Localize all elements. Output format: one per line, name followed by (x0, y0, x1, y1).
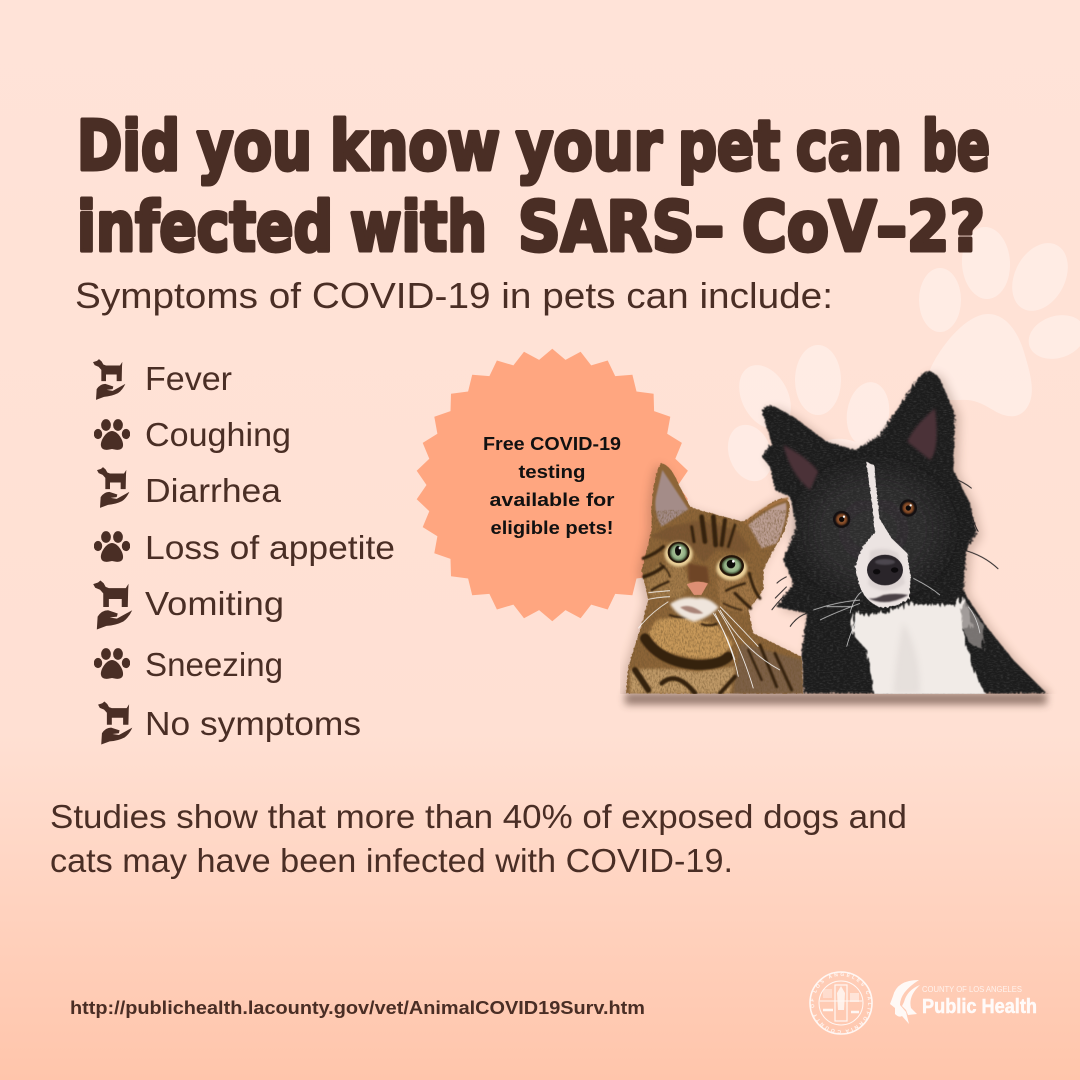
icon: paw (94, 531, 130, 562)
callout text: available for (490, 490, 614, 510)
starburst shape (417, 349, 688, 621)
cat fur texture (627, 510, 803, 693)
title: SARS– (518, 188, 724, 268)
cat nose and muzzle (670, 563, 719, 622)
title: Did (77, 106, 180, 186)
cat whiskers (638, 591, 780, 688)
cat (626, 463, 803, 693)
dog mouth (868, 594, 908, 602)
logo: public health (890, 980, 1037, 1024)
large paw watermark (919, 226, 1080, 416)
subtitle: Symptoms of COVID-19 in pets can include: (75, 275, 833, 316)
symptom: sneezing: Sneezing (145, 646, 283, 683)
symptom: coughing: Coughing (145, 416, 291, 453)
logo small text: COUNTY OF LOS ANGELES (922, 984, 1022, 994)
dog whiskers and wisps (813, 578, 980, 647)
icon: paw (94, 419, 130, 450)
cat ear left inner (655, 470, 688, 527)
logo faces (890, 980, 920, 1024)
photo bottom shadow (625, 693, 1047, 705)
icon: dog and hand (98, 701, 132, 745)
cat eyes (665, 541, 747, 580)
dog ear right inner (907, 408, 937, 460)
callout text (483, 434, 621, 538)
cat dark stripes (635, 517, 792, 693)
source url: http://publichealth.lacounty.gov/vet/AnimalCOVID19Surv.htm (70, 998, 645, 1018)
cat ear rim (745, 498, 788, 523)
icon: dog and hand (97, 467, 129, 508)
icon: dog and hand (93, 359, 125, 400)
dog stray hair (772, 478, 998, 627)
title: your (516, 106, 662, 186)
icon: paw (94, 648, 130, 679)
symptom list (93, 359, 395, 745)
dog eyes (833, 499, 917, 528)
statistic text: cats may have been infected with COVID-19. (50, 842, 733, 879)
photo soft shadow (623, 374, 1051, 696)
callout text: Free COVID-19 (483, 434, 621, 454)
starburst callout (417, 349, 688, 621)
dog right shoulder fur (962, 598, 983, 650)
title: with (350, 188, 487, 268)
dog nose (867, 555, 903, 585)
symptom: no symptoms: No symptoms (145, 705, 361, 742)
callout text: eligible pets! (490, 518, 614, 538)
statistic text (50, 798, 907, 879)
symptom: vomiting: Vomiting (145, 585, 284, 622)
title: pet (678, 106, 780, 186)
dog chest shading (895, 631, 918, 692)
cat cheek fur (645, 520, 760, 613)
dog (762, 370, 1047, 697)
photo: cat and dog (623, 370, 1051, 705)
title: infected (77, 188, 333, 268)
cat chest and body patches (630, 618, 803, 693)
symptom: loss of appetite: Loss of appetite (145, 529, 395, 566)
dog silhouette (762, 372, 1047, 693)
dog fur texture (763, 370, 1047, 693)
title: know (330, 106, 500, 186)
title: you (197, 106, 312, 186)
logo: county seal: COUNTY OF LOS ANGELES CALIFORNIA (810, 972, 872, 1034)
title (77, 106, 990, 268)
logo name: Public Health (922, 996, 1037, 1018)
symptom: fever: Fever (145, 360, 232, 397)
symptom: diarrhea: Diarrhea (145, 472, 282, 509)
title: CoV–2? (742, 188, 985, 268)
title: be (922, 106, 990, 186)
cat ear right inner (748, 503, 786, 548)
statistic text: Studies show that more than 40% of exposed dogs and (50, 798, 907, 835)
dog face (786, 474, 939, 586)
icon: dog and hand (93, 580, 132, 630)
dog muzzle shade (868, 549, 905, 590)
dog white chest (852, 597, 987, 697)
small paw watermark (720, 345, 893, 500)
dog white blaze and muzzle (855, 462, 911, 607)
cat silhouette (626, 463, 803, 693)
title: can (796, 106, 902, 186)
dog ear left inner (783, 445, 818, 490)
callout text: testing (518, 462, 586, 482)
